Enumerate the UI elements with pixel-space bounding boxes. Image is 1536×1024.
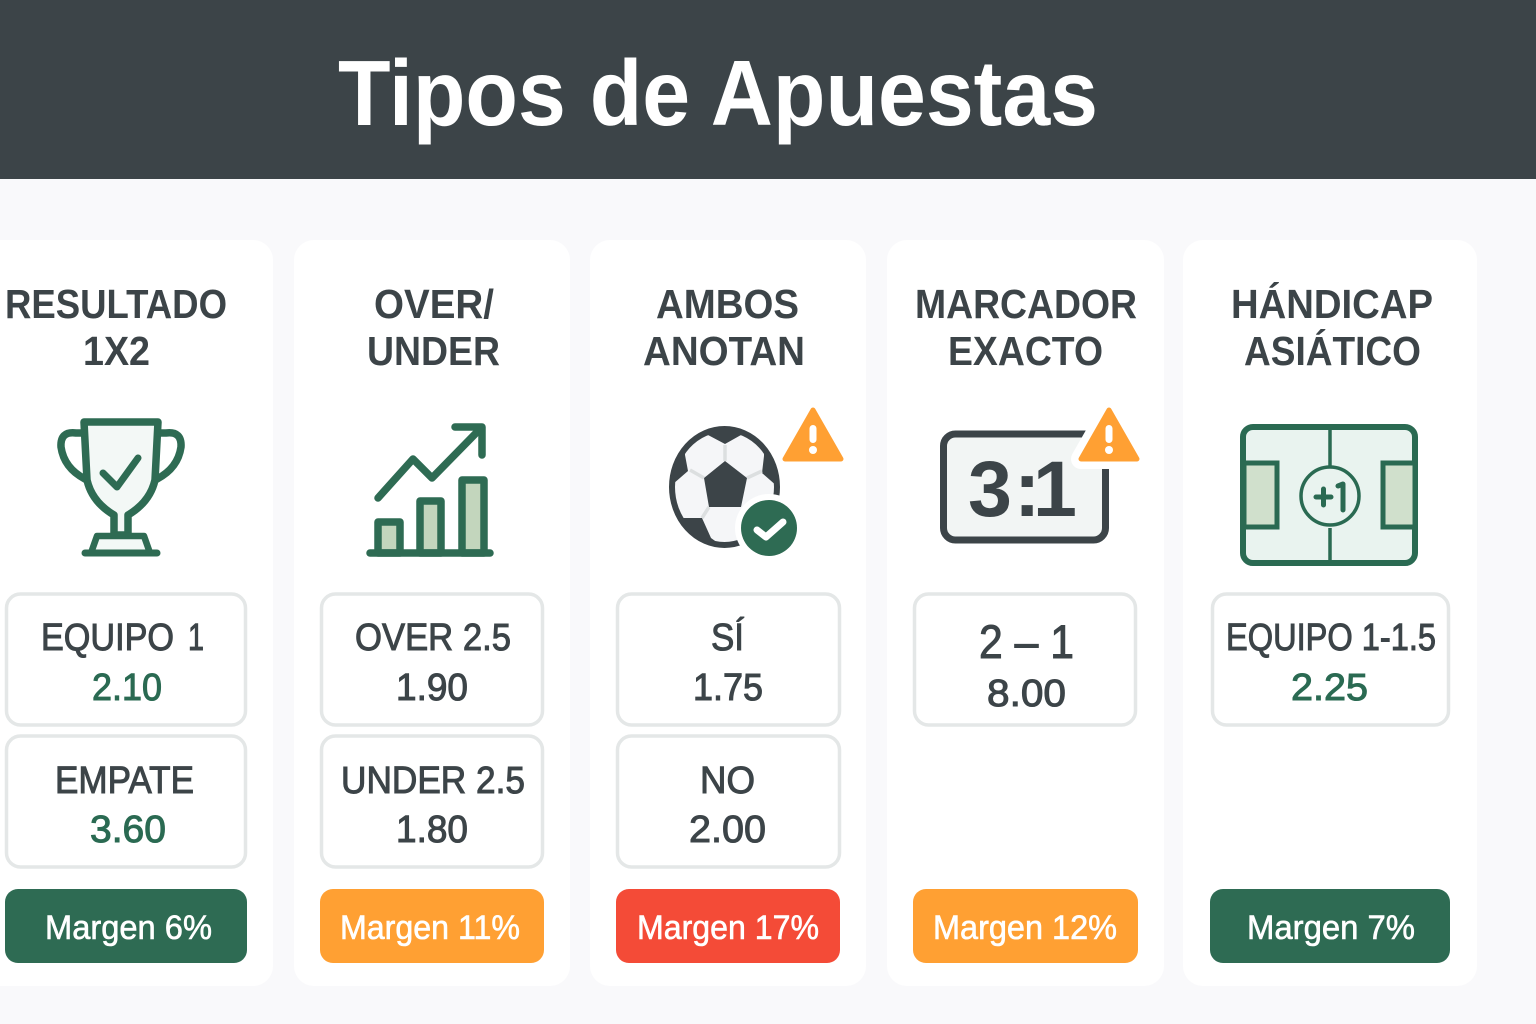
option: si: 1.75 xyxy=(693,667,763,709)
option: over 2.5 xyxy=(322,594,542,725)
panel: over/under xyxy=(294,240,570,986)
option: no: 2.00 xyxy=(689,809,766,851)
option: 2-1 xyxy=(914,594,1136,725)
option: empate xyxy=(6,736,246,867)
option: equipo 1 -1.5 xyxy=(1212,594,1448,725)
heading: resultado 1X2: RESULTADO xyxy=(5,281,227,327)
icon: scoreboard with warning: 1 xyxy=(1033,444,1077,533)
margin badge 17%: Margen 17% xyxy=(637,909,819,947)
margin badge 7%: Margen 7% xyxy=(1247,909,1415,947)
heading: handicap asiatico xyxy=(1231,281,1433,374)
option: over 2.5: OVER 2.5 xyxy=(355,617,511,659)
option: empate: 3.60 xyxy=(90,809,166,851)
icon: soccer ball with check and warning xyxy=(672,410,841,562)
heading: marcador exacto: MARCADOR xyxy=(915,281,1137,327)
margin badge 17% xyxy=(616,889,840,963)
panel: marcador exacto xyxy=(887,240,1164,986)
option: over 2.5: 1.90 xyxy=(396,667,468,709)
header band xyxy=(0,0,1536,179)
heading: over/under: OVER/ xyxy=(374,281,494,327)
option: under 2.5 xyxy=(322,736,542,867)
option: si xyxy=(618,594,840,725)
option: equipo 1: 1 xyxy=(188,617,204,659)
option: no: NO xyxy=(700,760,755,802)
heading: marcador exacto xyxy=(915,281,1137,374)
heading: marcador exacto: EXACTO xyxy=(948,328,1103,374)
panel: ambos anotan xyxy=(590,240,866,986)
icon: rising bar chart xyxy=(370,427,490,553)
option: 2-1: 8.00 xyxy=(987,673,1066,715)
margin badge 11%: Margen 11% xyxy=(340,909,520,947)
title: Tipos de Apuestas xyxy=(338,41,1098,145)
option: under 2.5: UNDER 2.5 xyxy=(341,760,525,802)
heading: ambos anotan: ANOTAN xyxy=(643,328,805,374)
heading: resultado 1X2: 1X2 xyxy=(83,328,150,374)
heading: handicap asiatico: ASIÁTICO xyxy=(1244,328,1421,374)
option: equipo 1 xyxy=(6,594,246,725)
option: under 2.5: 1.80 xyxy=(396,809,468,851)
heading: handicap asiatico: HÁNDICAP xyxy=(1231,281,1433,327)
option: equipo 1: 2.10 xyxy=(92,667,162,709)
icon: trophy with check xyxy=(61,422,181,553)
option: si: SÍ xyxy=(711,616,744,659)
panel: resultado 1X2 xyxy=(0,240,273,986)
heading: ambos anotan xyxy=(643,281,805,374)
option: equipo 1 -1.5: 2.25 xyxy=(1291,667,1368,709)
option: no xyxy=(618,736,840,867)
margin badge 6%: Margen 6% xyxy=(45,909,212,947)
icon: football pitch with +1 xyxy=(1243,427,1415,563)
heading: over/under: UNDER xyxy=(367,328,500,374)
margin badge 11% xyxy=(320,889,544,963)
margin badge 12% xyxy=(913,889,1138,963)
option: empate: EMPATE xyxy=(55,760,194,802)
margin badge 7% xyxy=(1210,889,1450,963)
icon: scoreboard with warning xyxy=(944,410,1137,540)
margin badge 6% xyxy=(5,889,247,963)
option: equipo 1: EQUIPO xyxy=(41,617,174,659)
heading: resultado 1X2 xyxy=(5,281,227,374)
option: equipo 1 -1.5: EQUIPO 1-1.5 xyxy=(1226,617,1436,659)
icon: scoreboard with warning: 3 xyxy=(968,444,1012,533)
heading: over/under xyxy=(367,281,500,374)
panel: handicap asiatico xyxy=(1183,240,1477,986)
heading: ambos anotan: AMBOS xyxy=(656,281,799,327)
margin badge 12%: Margen 12% xyxy=(933,909,1117,947)
icon: scoreboard with warning: : xyxy=(1014,444,1040,533)
option: 2-1: 2 – 1 xyxy=(979,615,1074,668)
